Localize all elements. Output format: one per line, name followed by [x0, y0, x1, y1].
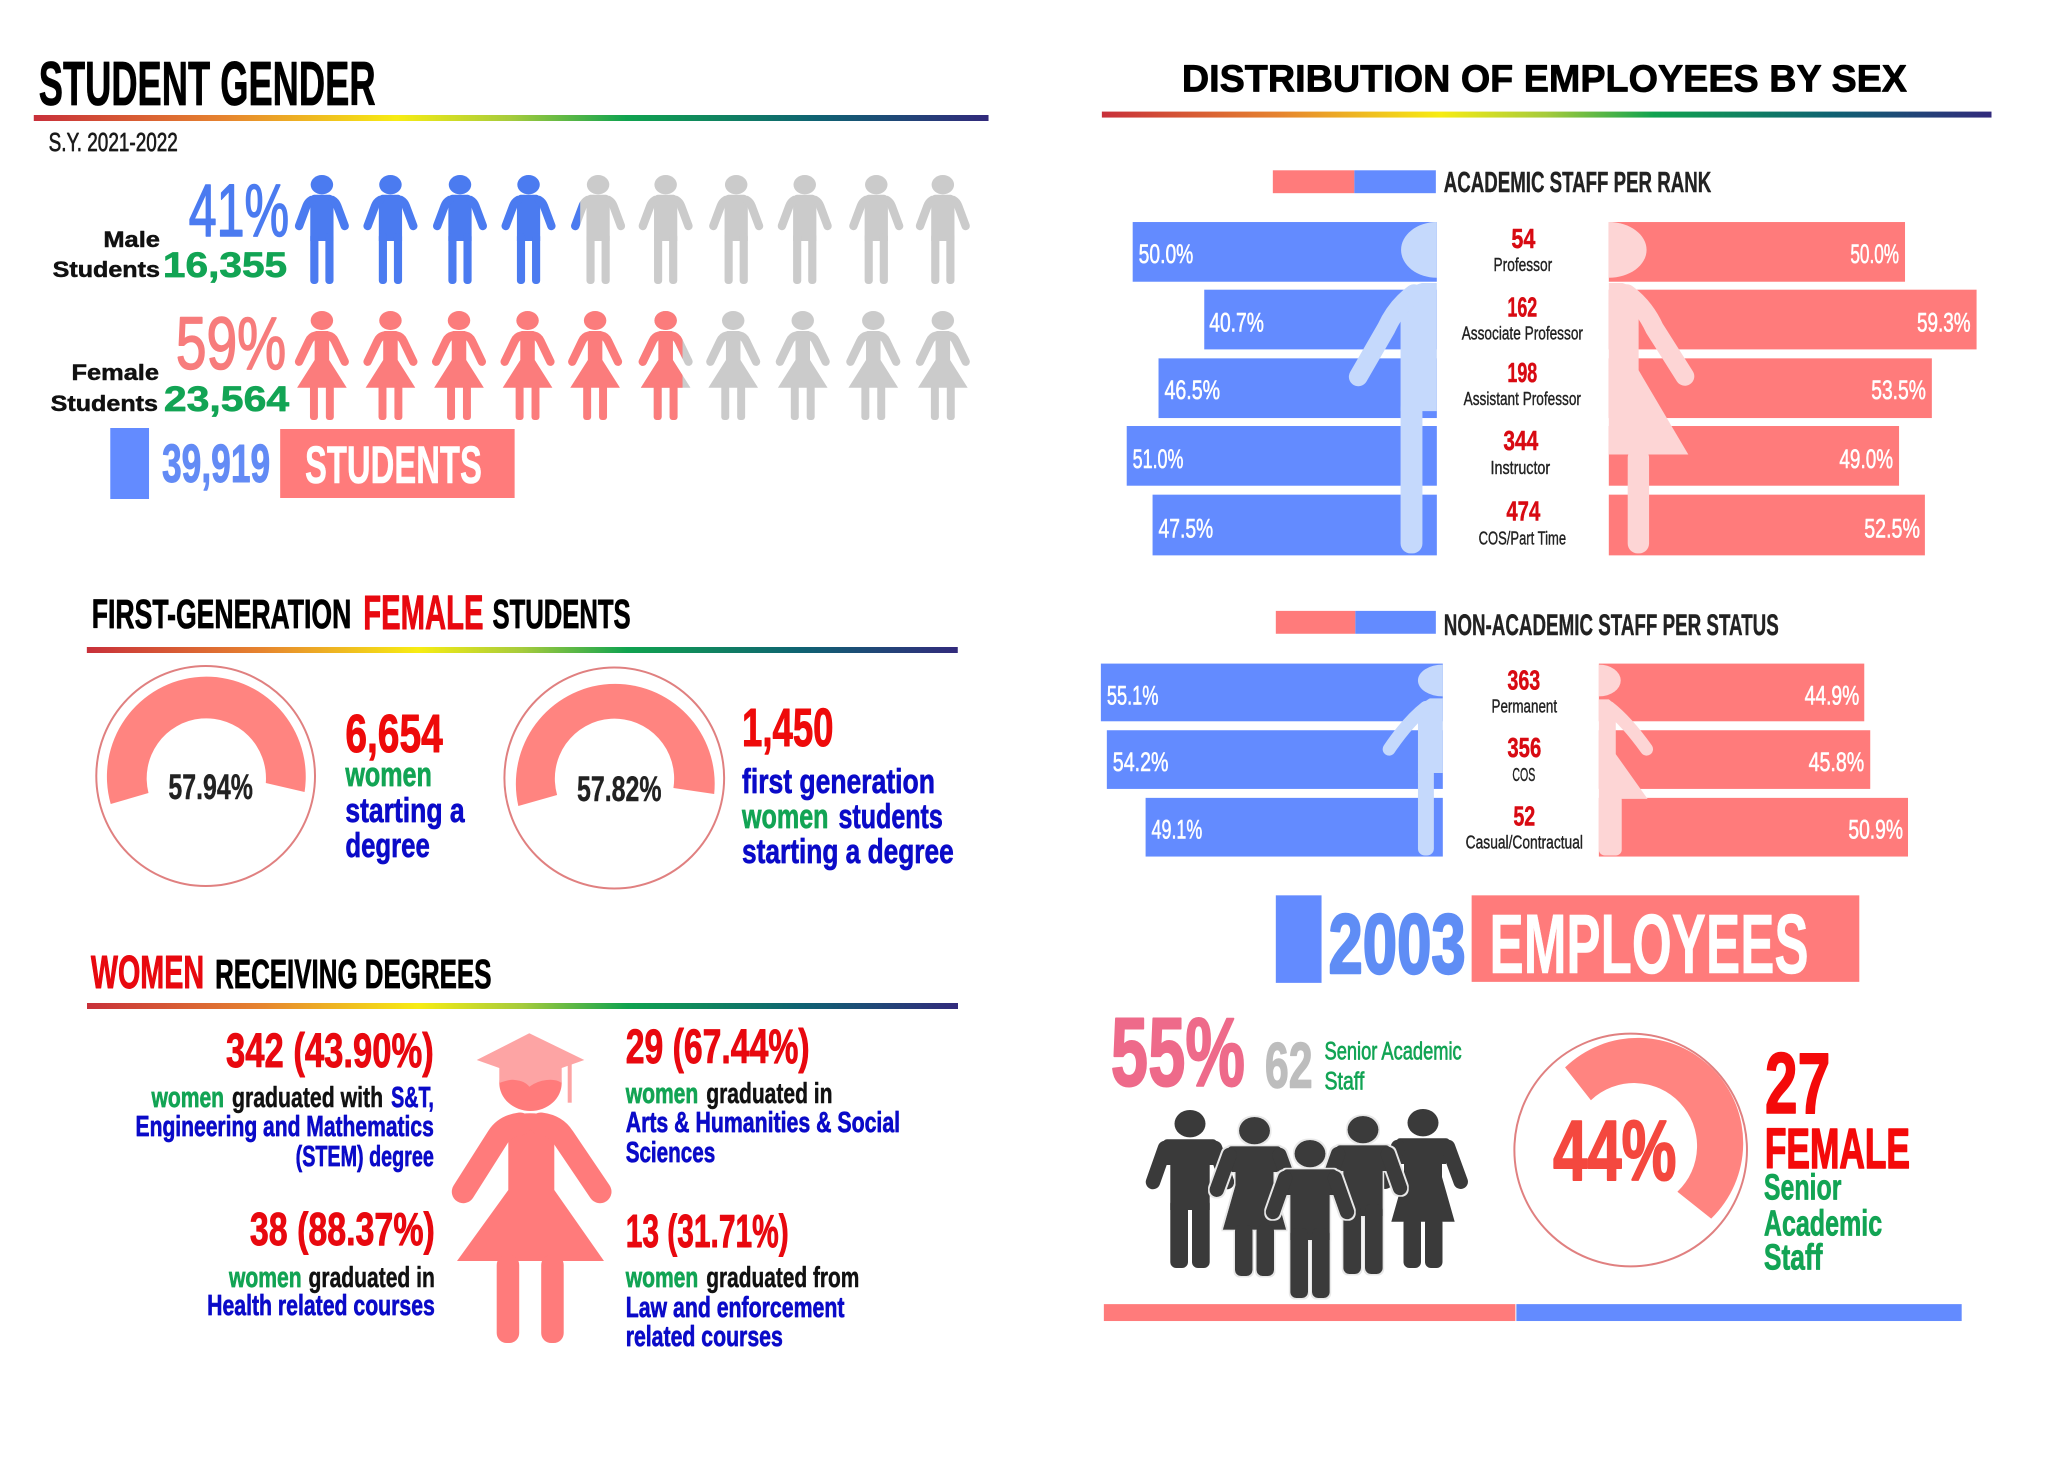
legend: academic staff per rank: ACADEMIC STAFF PER RANK [1444, 167, 1711, 199]
pictogram: female students 59 of 100 [297, 311, 968, 420]
stat: arts and humanities graduates [625, 1021, 900, 1169]
stat: 6,654 women starting a degree [345, 704, 466, 865]
stat: law and enforcement graduates: Law and enforcement [626, 1292, 845, 1324]
stat: 6,654 women starting a degree: 6,654 [345, 704, 443, 764]
stat: health graduates: 38 (88.37%) [250, 1203, 435, 1255]
chart: academic staff female bars [1609, 222, 1977, 555]
employees banner [1472, 895, 1859, 991]
chart: non-academic staff female bars: 45.8% [1809, 747, 1864, 777]
rank labels: Assistant Professor [1464, 389, 1581, 410]
rank labels: 344 [1503, 425, 1539, 456]
chart: non-academic staff male bars [1101, 664, 1443, 857]
rainbow rule: student gender [34, 115, 989, 121]
stat: health graduates: women [228, 1262, 302, 1294]
senior academic staff label: Staff [1325, 1068, 1364, 1095]
stat: arts and humanities graduates: women [625, 1078, 698, 1110]
stat: 1,450 first generation women students [741, 698, 954, 871]
chart: academic staff male bars: 40.7% [1209, 307, 1264, 337]
panel: women receiving degrees [87, 946, 958, 1353]
status labels: Permanent [1492, 696, 1558, 717]
senior academic staff count: 62 [1265, 1030, 1313, 1101]
stat: 27 female senior academic staff: Senior [1764, 1168, 1841, 1208]
stat: 27 female senior academic staff: FEMALE [1765, 1118, 1910, 1181]
stat: 27 female senior academic staff: Staff [1764, 1237, 1823, 1277]
stat: law and enforcement graduates: 13 (31.71%) [626, 1205, 789, 1257]
stat: STEM graduates: 342 (43.90%) [226, 1025, 434, 1078]
chart: academic staff male bars: 50.0% [1139, 239, 1193, 269]
rainbow rule: women receiving degrees [87, 1003, 958, 1009]
stat: STEM graduates [136, 1025, 434, 1173]
male count: 16,355 [163, 246, 287, 285]
status labels: 356 [1507, 732, 1541, 763]
title: distribution of employees by sex: DISTRIBUTION OF EMPLOYEES BY SEX [1182, 59, 1907, 101]
male label: Students [53, 257, 160, 282]
stat: 27 female senior academic staff [1764, 1036, 1910, 1277]
chart: non-academic staff male bars: 49.1% [1152, 815, 1202, 845]
gauge: 44% female senior academic staff: 44% [1553, 1104, 1676, 1199]
stat: STEM graduates: graduated with [232, 1082, 383, 1114]
heading: first-generation female students [92, 587, 631, 640]
stat: 27 female senior academic staff: Academic [1764, 1203, 1882, 1243]
total students number: 39,919 [162, 434, 270, 494]
chart: academic staff female bars: 49.0% [1839, 444, 1893, 474]
male label: Male [103, 227, 160, 252]
panel: student gender [34, 50, 989, 499]
title: student gender: STUDENT GENDER [39, 50, 376, 119]
chart: academic staff male bars: 47.5% [1159, 513, 1213, 543]
stat: 1,450 first generation women students: first generation [742, 763, 935, 801]
chart: academic staff female bars: 50.0% [1850, 239, 1899, 269]
stat: 1,450 first generation women students: students [838, 798, 943, 836]
chart: academic staff female bars: 52.5% [1864, 513, 1920, 543]
heading: women receiving degrees [91, 946, 491, 998]
heading: first-generation female students: STUDENTS [492, 591, 631, 637]
heading: women receiving degrees: RECEIVING DEGREES [215, 951, 491, 997]
stat: STEM graduates: Engineering and Mathematics [136, 1111, 434, 1143]
stat: 6,654 women starting a degree: degree [345, 827, 430, 865]
senior academic staff label [1325, 1038, 1462, 1095]
stat: law and enforcement graduates: related courses [626, 1321, 783, 1353]
stat: arts and humanities graduates: 29 (67.44%) [626, 1021, 810, 1074]
total employees number: 2003 [1329, 896, 1466, 991]
school year label: S.Y. 2021-2022 [49, 129, 178, 157]
rank labels: 162 [1507, 292, 1537, 323]
stat: STEM graduates: women [151, 1082, 224, 1114]
panel: first-generation female students [87, 587, 958, 888]
rank labels: 198 [1507, 357, 1537, 388]
rainbow rule: employees [1102, 112, 1991, 118]
heading: first-generation female students: FEMALE [363, 587, 484, 640]
female label: Female [72, 360, 159, 385]
stat: STEM graduates: (STEM) degree [296, 1141, 434, 1173]
chart: academic staff female bars: 53.5% [1871, 375, 1926, 405]
male percentage: 41% [189, 169, 289, 252]
senior academic staff percentage: 55% [1111, 997, 1245, 1106]
chart: non-academic staff female bars: 50.9% [1848, 815, 1903, 845]
male label [53, 227, 160, 282]
stat: arts and humanities graduates: Arts & Humanities & Social [626, 1107, 900, 1139]
pictogram: male students 41 of 100 [299, 175, 966, 284]
rainbow rule: first-generation [87, 647, 958, 653]
heading: first-generation female students: FIRST-GENERATION [92, 591, 351, 637]
gauge: 57.82% [504, 668, 724, 888]
legend: academic staff per rank [1273, 167, 1711, 199]
stat: health graduates [207, 1203, 435, 1322]
students banner: STUDENTS [305, 436, 482, 495]
gauge: 57.82%: 57.82% [577, 770, 661, 809]
female label [51, 360, 159, 416]
status labels: COS [1512, 765, 1535, 786]
stat: 1,450 first generation women students: 1,450 [742, 698, 833, 758]
blue marker: total employees [1276, 895, 1322, 983]
students banner [280, 429, 515, 498]
stat: law and enforcement graduates [625, 1205, 859, 1353]
icon: female silhouette small [1599, 665, 1648, 856]
heading: women receiving degrees: WOMEN [91, 946, 204, 998]
rank labels: Associate Professor [1462, 323, 1583, 344]
female label: Students [51, 391, 158, 416]
employees banner: EMPLOYEES [1490, 896, 1809, 991]
chart: non-academic staff male bars: 54.2% [1113, 747, 1168, 777]
stat: STEM graduates: S&T, [391, 1082, 434, 1114]
stat: arts and humanities graduates: graduated in [706, 1078, 832, 1110]
stat: law and enforcement graduates: graduated from [706, 1262, 859, 1294]
stat: 1,450 first generation women students: women [741, 798, 829, 836]
legend: non-academic staff per status: NON-ACADEMIC STAFF PER STATUS [1444, 609, 1779, 642]
chart: non-academic staff female bars: 44.9% [1805, 680, 1859, 710]
senior academic staff label: Senior Academic [1325, 1038, 1462, 1065]
stat: 6,654 women starting a degree: women [345, 756, 432, 794]
gauge: 44% female senior academic staff [1514, 1034, 1747, 1266]
chart: academic staff male bars: 51.0% [1133, 444, 1183, 474]
chart: academic staff female bars: 59.3% [1917, 307, 1971, 337]
status labels: 363 [1507, 664, 1540, 695]
stat: law and enforcement graduates: women [625, 1262, 698, 1294]
rank labels: Professor [1494, 255, 1552, 276]
chart: non-academic staff female bars [1599, 664, 1908, 857]
female count: 23,564 [164, 380, 290, 419]
stat: health graduates: Health related courses [207, 1290, 435, 1322]
female percentage: 59% [176, 302, 286, 385]
icon: female silhouette [1609, 222, 1688, 553]
chart: academic staff male bars: 46.5% [1164, 375, 1220, 405]
stat: arts and humanities graduates: Sciences [626, 1137, 715, 1169]
rank labels: Instructor [1491, 458, 1550, 479]
gauge: 57.94% [96, 666, 315, 886]
icon: male silhouette small [1389, 665, 1443, 856]
status labels [1466, 664, 1583, 854]
legend: non-academic staff per status [1276, 609, 1779, 642]
chart: non-academic staff male bars: 55.1% [1107, 680, 1159, 710]
rank labels: 474 [1506, 496, 1541, 527]
rank labels: COS/Part Time [1479, 528, 1566, 549]
status labels: Casual/Contractual [1466, 833, 1583, 854]
stat: health graduates: graduated in [309, 1262, 435, 1294]
split bar: female and male share [1104, 1304, 1962, 1321]
panel: academic staff distribution [1102, 59, 1991, 555]
panel: non-academic staff and totals [1101, 609, 1962, 1321]
chart: academic staff male bars [1127, 222, 1437, 555]
gauge: 57.94%: 57.94% [168, 768, 253, 807]
icon: group of people [1153, 1109, 1461, 1298]
rank labels [1462, 223, 1583, 549]
status labels: 52 [1513, 801, 1535, 832]
icon: male silhouette [1358, 222, 1437, 553]
stat: 1,450 first generation women students: starting a degree [742, 833, 954, 871]
blue marker: total students [110, 428, 149, 499]
icon: female graduate [457, 1033, 604, 1343]
rank labels: 54 [1511, 223, 1536, 254]
stat: 27 female senior academic staff: 27 [1765, 1036, 1830, 1132]
stat: 6,654 women starting a degree: starting a [345, 792, 466, 830]
